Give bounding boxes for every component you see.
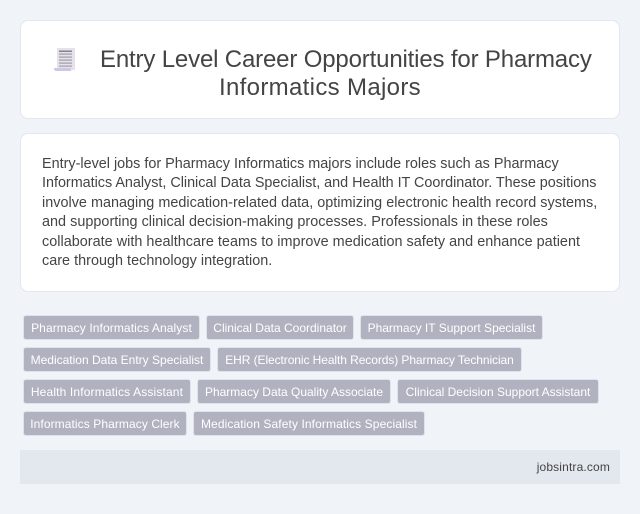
description text: and supporting clinical decision-making processes. Professionals in these roles (42, 214, 548, 230)
panel: description (20, 133, 620, 292)
heading line 1: Entry Level Career Opportunities for Pharmacy (100, 46, 592, 73)
panel: job role tags (23, 315, 599, 436)
tag: Pharmacy IT Support Specialist (368, 321, 535, 335)
description text: collaborate with healthcare teams to improve medication safety and enhance patient (42, 234, 580, 250)
icon: document scroll (54, 48, 75, 71)
description text: care through technology integration. (42, 253, 272, 269)
tag: Pharmacy Informatics Analyst (31, 321, 192, 335)
tag (197, 379, 391, 404)
panel: footer (20, 450, 620, 484)
tag: Clinical Data Coordinator (213, 321, 347, 335)
heading line 2: Informatics Majors (219, 74, 421, 101)
tag: Clinical Decision Support Assistant (406, 385, 590, 399)
footer source text: jobsintra.com (537, 460, 610, 474)
tag: Informatics Pharmacy Clerk (30, 417, 180, 431)
tag (23, 411, 187, 436)
tag (206, 315, 354, 340)
tag: Medication Safety Informatics Specialist (201, 417, 417, 431)
tag (217, 347, 522, 372)
tag (193, 411, 425, 436)
description text: involve managing medication-related data, optimizing electronic health record systems, (42, 195, 597, 211)
tag (23, 347, 211, 372)
tag (23, 315, 200, 340)
tag: EHR (Electronic Health Records) Pharmacy Technician (225, 353, 514, 367)
tag (23, 379, 191, 404)
tag: Health Informatics Assistant (31, 385, 183, 399)
tag (360, 315, 543, 340)
description text (42, 156, 597, 269)
description text: Informatics Analyst, Clinical Data Specialist, and Health IT Coordinator. These positions (42, 175, 596, 191)
description text: Entry-level jobs for Pharmacy Informatics majors include roles such as Pharmacy (42, 156, 559, 172)
tag: Medication Data Entry Specialist (31, 353, 203, 367)
tag (397, 379, 599, 404)
tag: Pharmacy Data Quality Associate (205, 385, 383, 399)
panel: title header (20, 20, 620, 119)
